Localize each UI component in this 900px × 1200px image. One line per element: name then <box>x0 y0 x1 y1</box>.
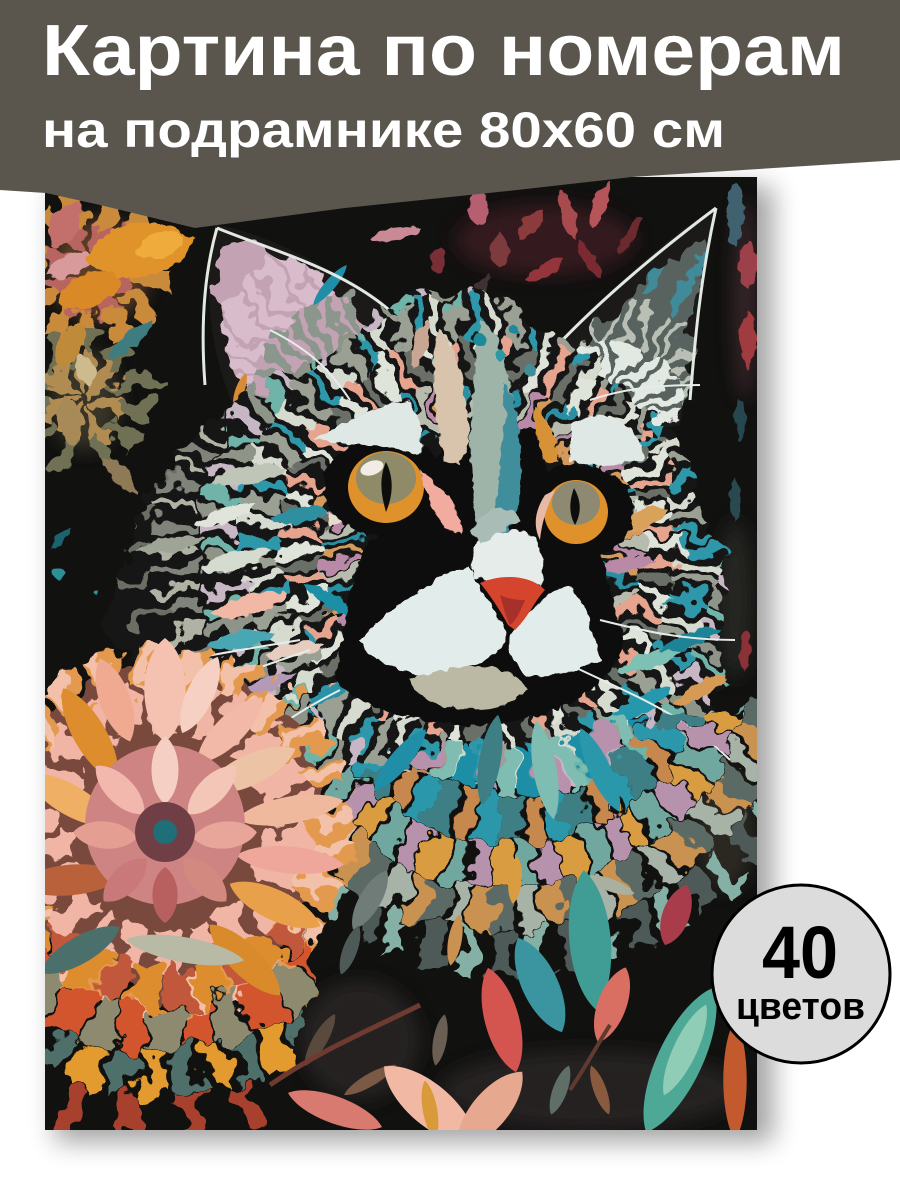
cat muzzle <box>360 568 600 709</box>
bottom leaves and buds <box>268 870 747 1130</box>
top foliage <box>369 178 757 670</box>
badge: 40 colours <box>712 885 890 1063</box>
cat head fur base <box>116 286 732 788</box>
top-left orange flower and foliage <box>45 196 196 595</box>
badge label: цветов <box>736 986 865 1028</box>
title line 1: Картина по номерам <box>42 11 845 91</box>
dark mask around the eyes <box>324 430 633 725</box>
cat left cheek fur <box>133 460 364 710</box>
header banner <box>0 0 900 228</box>
title line 2: на подрамнике 80х60 см <box>42 102 725 158</box>
left ear <box>209 226 386 403</box>
badge number: 40 <box>762 911 838 994</box>
cat chest feathers <box>324 694 757 980</box>
painting: cat and flowers <box>45 177 757 1130</box>
cat forehead stripes <box>315 318 645 535</box>
blurred colour patches <box>50 200 757 1130</box>
cat nose bridge <box>420 470 543 588</box>
whiskers <box>210 329 735 761</box>
cat left eye <box>348 451 424 523</box>
painting background <box>45 177 757 1130</box>
right ear <box>202 206 718 428</box>
cat right cheek fur <box>604 505 727 723</box>
cat right eye <box>536 480 608 544</box>
big pink flower <box>45 638 358 1130</box>
canvas shadow <box>55 186 773 1142</box>
cat nose <box>480 577 545 630</box>
